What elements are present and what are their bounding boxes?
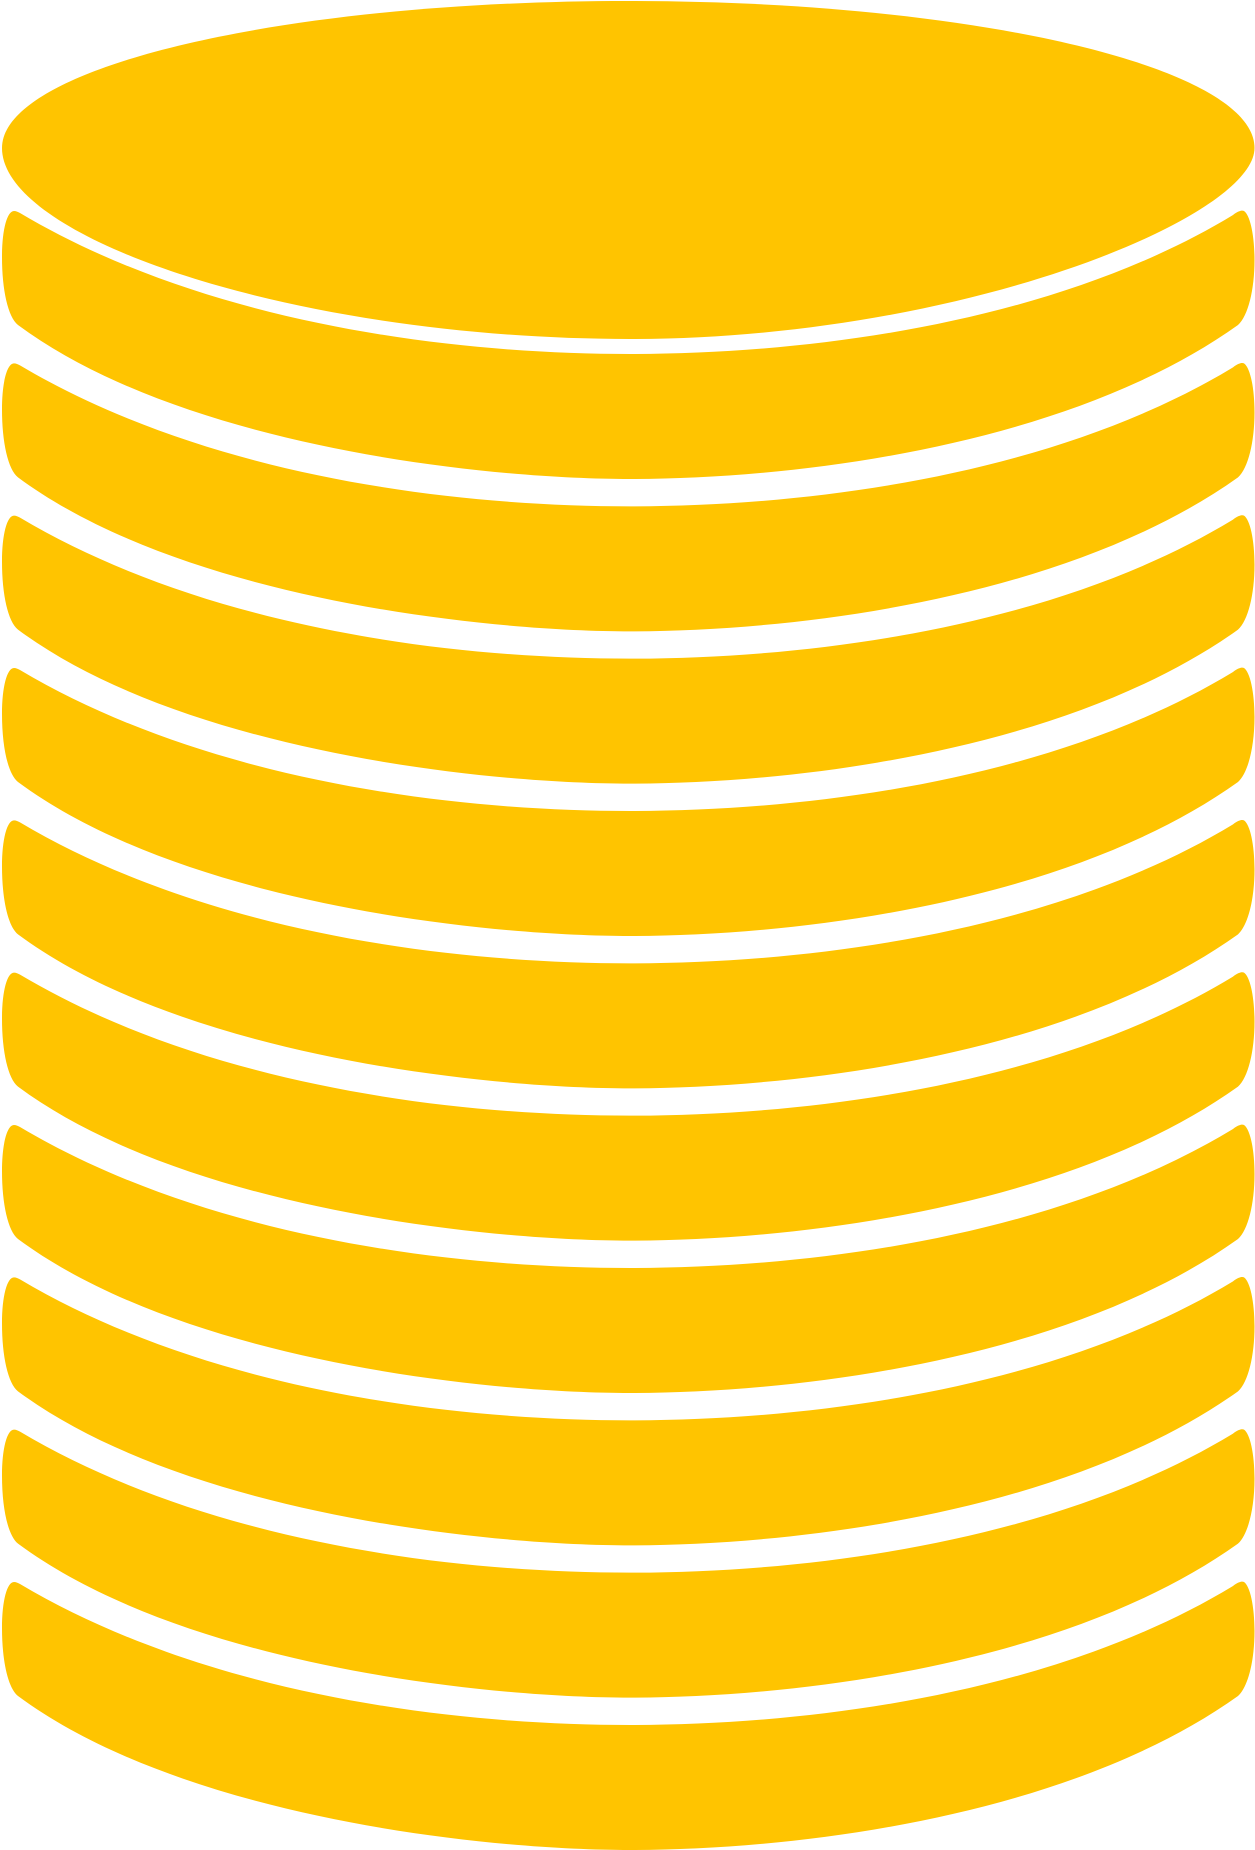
coin 4 (2, 668, 1254, 936)
coin 5 (2, 820, 1254, 1088)
coin 2 (2, 363, 1254, 631)
coin 1 (2, 211, 1254, 479)
coin 7 (2, 1125, 1254, 1393)
coin 8 (2, 1277, 1254, 1545)
coin top face (2, 1, 1254, 339)
coin 3 (2, 515, 1254, 784)
coin 10 (2, 1582, 1254, 1850)
coin 6 (2, 972, 1254, 1241)
coin 9 (2, 1429, 1254, 1698)
